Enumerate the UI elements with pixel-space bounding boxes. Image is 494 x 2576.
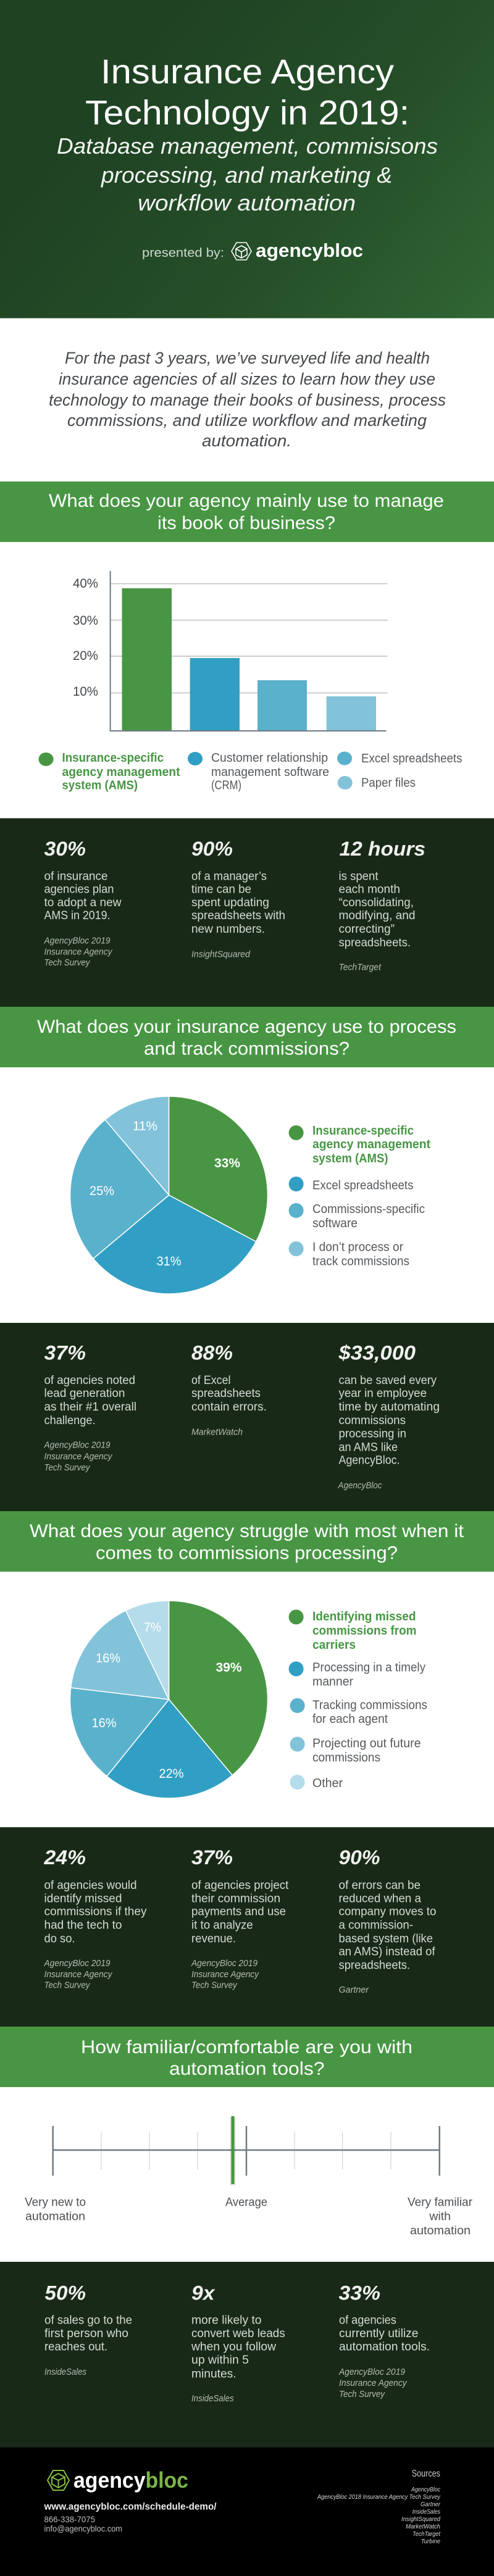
stat: 9x: 9x	[191, 2282, 216, 2304]
bar chart legend: Insurance-specific	[62, 751, 164, 765]
panel: section 3 heading	[0, 1511, 494, 1572]
bar chart legend: (CRM)	[211, 779, 241, 793]
intro text: insurance agencies of all sizes to learn how they use	[59, 370, 435, 388]
stat: 37%: Tech Survey	[44, 1462, 91, 1473]
bar chart: 20%	[73, 649, 98, 663]
stat: 9x: InsideSales	[191, 2393, 234, 2404]
pie chart: commission tracking tools: 31%	[157, 1254, 182, 1269]
stat: 33%: Tech Survey	[339, 2389, 385, 2399]
pie legend: commission tracking tools: Excel spreadsheets	[312, 1179, 414, 1193]
stat: 90%: new numbers.	[191, 923, 265, 936]
icon: agencybloc hexagon logo	[232, 243, 251, 260]
stat: 30%: agencies plan	[44, 883, 114, 896]
pie legend: commission tracking tools: agency management	[312, 1138, 430, 1151]
stat: 24%: 24%	[43, 1846, 86, 1869]
stat: 37% projections: 37%	[191, 1846, 233, 1869]
bar chart	[73, 571, 388, 731]
pie legend: commissions struggles: Tracking commissions	[312, 1699, 427, 1712]
pie legend: commissions struggles: Projecting out future	[312, 1737, 421, 1751]
contact details: 866-338-7075	[44, 2514, 95, 2524]
stat: 88%: MarketWatch	[191, 1427, 243, 1437]
contact details: info@agencybloc.com	[44, 2524, 122, 2533]
intro text: commissions, and utilize workflow and marketing	[67, 411, 427, 430]
average marker	[230, 2116, 236, 2185]
panel: section 1 heading: its book of business?	[157, 513, 335, 533]
stat: 30%: to adopt a new	[44, 896, 122, 909]
stat: $33,000: year in employee	[338, 1387, 427, 1400]
stat: 88%: of Excel	[191, 1374, 231, 1387]
intro text	[49, 349, 446, 450]
stat: 9x: convert web leads	[191, 2327, 285, 2340]
contact details	[44, 2502, 217, 2533]
pie legend: commissions struggles: manner	[312, 1675, 353, 1689]
stat: $33,000: time by automating	[338, 1401, 440, 1414]
panel: section 2 heading: and track commissions?	[144, 1038, 350, 1059]
stat: 12 hours: TechTarget	[338, 962, 382, 973]
stat: 37%: AgencyBloc 2019	[44, 1440, 111, 1451]
pie legend: commissions struggles: Processing in a timely	[312, 1661, 425, 1674]
panel: section 3 heading: What does your agency struggle with most when it	[30, 1521, 464, 1541]
panel: section 4 heading	[0, 2027, 494, 2087]
panel: footer	[0, 2447, 494, 2576]
panel: section 3 heading: comes to commissions processing?	[96, 1543, 398, 1563]
logo wordmark: agencybloc	[256, 240, 363, 261]
pie legend: commissions struggles: Identifying missed	[312, 1610, 416, 1624]
stat: 37% projections: payments and use	[191, 1906, 286, 1919]
stat: 88%: spreadsheets	[191, 1387, 261, 1400]
pie chart: commission tracking tools: 25%	[90, 1184, 114, 1198]
stat: 12 hours: is spent	[338, 870, 379, 883]
stat: 30%: 30%	[44, 838, 86, 860]
stat: 30%: AMS in 2019.	[44, 909, 110, 922]
intro text: For the past 3 years, we’ve surveyed life and health	[65, 349, 430, 367]
pie chart: commission tracking tools	[70, 1096, 267, 1294]
stat: 30%: Insurance Agency	[44, 947, 113, 957]
stat: 24%: of agencies would	[44, 1879, 137, 1892]
intro text: automation.	[202, 431, 291, 450]
pie chart: commissions struggles: 16%	[91, 1716, 116, 1730]
stat: 37% projections: Insurance Agency	[191, 1969, 259, 1980]
pie chart: commission tracking tools: 11%	[133, 1119, 157, 1133]
stat: 33%: currently utilize	[339, 2327, 419, 2340]
stat: 37%: Insurance Agency	[44, 1451, 113, 1462]
bar chart legend: Customer relationship	[211, 751, 328, 765]
stat: 37%: challenge.	[44, 1414, 95, 1427]
stat: 90% errors: a commission-	[338, 1919, 413, 1932]
title: Insurance Agency	[101, 52, 394, 91]
pie legend: commissions struggles: Other	[312, 1777, 343, 1790]
stat: 12 hours	[338, 838, 425, 973]
bar chart: 30%	[73, 614, 98, 628]
stat: 90%: 90%	[191, 838, 233, 860]
stat: $33,000	[338, 1342, 440, 1491]
stat: 9x: minutes.	[191, 2368, 237, 2380]
bar chart legend: management software	[211, 765, 329, 779]
stat: $33,000: AgencyBloc	[338, 1480, 382, 1491]
stat: 88%: 88%	[191, 1342, 233, 1364]
subtitle: processing, and marketing &	[101, 162, 392, 188]
stat: 30%: Tech Survey	[44, 957, 91, 968]
bar chart legend: system (AMS)	[62, 779, 138, 793]
pie chart: commissions struggles: 7%	[144, 1620, 161, 1635]
stat: 50%	[44, 2282, 132, 2377]
sources list: AgencyBloc 2018 Insurance Agency Tech Survey	[317, 2493, 441, 2501]
scale labels: with	[429, 2210, 451, 2224]
stat: 90% errors: 90%	[338, 1846, 380, 1869]
stat: 33%: AgencyBloc 2019	[338, 2367, 406, 2377]
sources list: AgencyBloc	[411, 2486, 441, 2493]
stat: 12 hours: “consolidating,	[338, 896, 414, 909]
pie legend: commissions struggles: for each agent	[312, 1712, 388, 1726]
footer logo wordmark: agencybloc	[73, 2467, 188, 2493]
stat: 37%: as their #1 overall	[44, 1401, 136, 1414]
stat: 90%: time can be	[191, 883, 251, 896]
stat: 33%: automation tools.	[339, 2341, 430, 2353]
panel: section 4 heading: automation tools?	[169, 2059, 325, 2079]
stat: 50%: InsideSales	[44, 2367, 86, 2377]
stat: 24%: AgencyBloc 2019	[44, 1958, 111, 1969]
stat: $33,000: an AMS like	[338, 1441, 398, 1454]
stat: 50%: 50%	[44, 2282, 86, 2304]
stat: 90% errors: company moves to	[338, 1906, 436, 1919]
presented by label: presented by:	[142, 246, 224, 260]
panel: section 2 heading	[0, 1007, 494, 1067]
stat: 24%: Insurance Agency	[44, 1969, 113, 1980]
pie legend: commission tracking tools: system (AMS)	[312, 1152, 388, 1165]
panel: section 1 stats	[0, 819, 494, 1007]
sources list: Gartner	[421, 2501, 440, 2508]
stat: 30%: of insurance	[44, 870, 107, 883]
stat: 37% projections: of agencies project	[191, 1879, 289, 1892]
sources list: TechTarget	[412, 2530, 441, 2538]
sources list: Turbine	[421, 2538, 440, 2545]
stat: 30%: AgencyBloc 2019	[44, 936, 111, 946]
pie chart: commissions struggles	[70, 1601, 268, 1798]
stat: 12 hours: correcting”	[338, 923, 395, 936]
stat: 88%: contain errors.	[191, 1401, 267, 1414]
stat: 50%: of sales go to the	[44, 2314, 132, 2327]
pie chart: commission tracking tools: 33%	[214, 1156, 240, 1170]
panel: section 3 stats	[0, 1827, 494, 2027]
bar chart legend: Excel spreadsheets	[361, 752, 462, 765]
stat: 12 hours: spreadsheets.	[338, 936, 411, 949]
stat: 9x: when you follow	[191, 2341, 276, 2353]
stat: 37%: 37%	[44, 1342, 86, 1364]
pie chart: commissions struggles: 39%	[216, 1661, 242, 1675]
stat: 12 hours: modifying, and	[338, 909, 415, 922]
icon: footer hexagon logo	[48, 2470, 69, 2490]
stat: 37%: of agencies noted	[44, 1374, 135, 1387]
stat: 37%: lead generation	[44, 1387, 125, 1400]
stat: 24%: commissions if they	[44, 1906, 147, 1919]
pie legend: commissions struggles: commissions from	[312, 1624, 416, 1638]
stat: 90%: spent updating	[191, 896, 269, 909]
stat: 37% projections: their commission	[191, 1893, 280, 1906]
stat: 88%	[191, 1342, 267, 1437]
pie chart: commissions struggles: 22%	[159, 1767, 184, 1781]
subtitle: Database management, commisisons	[57, 133, 438, 159]
panel: section 2 stats	[0, 1323, 494, 1511]
subtitle: workflow automation	[138, 190, 356, 215]
panel: section 1 heading	[0, 481, 494, 542]
stat: 90%	[191, 838, 285, 959]
pie legend: commission tracking tools: Commissions-specific	[312, 1203, 425, 1216]
stat: $33,000: can be saved every	[338, 1374, 437, 1387]
pie legend: commission tracking tools: I don’t process or	[312, 1241, 403, 1254]
stat: 9x: more likely to	[191, 2314, 262, 2327]
stat: 90% errors: based system (like	[338, 1932, 433, 1946]
scale labels	[25, 2196, 473, 2237]
stat: 90% errors: spreadsheets.	[338, 1959, 410, 1972]
panel: section 4 stats	[0, 2262, 494, 2447]
sources list: Sources	[412, 2469, 440, 2479]
stat: 37%	[44, 1342, 136, 1473]
stat: 12 hours: 12 hours	[340, 838, 425, 860]
scale labels: Average	[225, 2196, 267, 2209]
stat: 24%: identify missed	[44, 1893, 122, 1906]
stat: 37% projections: it to analyze	[191, 1919, 253, 1932]
stat: 37% projections: revenue.	[191, 1932, 236, 1946]
bar chart legend	[38, 751, 462, 793]
contact details: www.agencybloc.com/schedule-demo/	[44, 2502, 217, 2512]
sources list: InsightSquared	[401, 2516, 441, 2523]
stat: 24%: had the tech to	[44, 1919, 122, 1932]
scale chart: automation familiarity	[25, 2116, 473, 2237]
pie legend: commission tracking tools: track commissions	[312, 1254, 409, 1268]
stat: $33,000: commissions	[338, 1414, 406, 1427]
pie chart: commissions struggles: 16%	[96, 1651, 120, 1665]
scale labels: automation	[410, 2225, 471, 2237]
scale labels: Very familiar	[408, 2196, 473, 2209]
pie legend: commissions struggles: commissions	[312, 1751, 380, 1765]
pie legend: commission tracking tools: Insurance-specific	[312, 1124, 414, 1138]
stat: 90% errors	[338, 1846, 436, 1995]
stat: 90% errors: reduced when a	[338, 1893, 421, 1906]
pie legend: commissions struggles: carriers	[312, 1638, 356, 1652]
stat: 37% projections: Tech Survey	[191, 1980, 238, 1990]
stat: 24%: do so.	[44, 1932, 75, 1946]
pie legend: commission tracking tools	[289, 1124, 430, 1268]
panel: section 2 heading: What does your insurance agency use to process	[37, 1017, 456, 1037]
scale labels: automation	[25, 2210, 85, 2224]
stat: 90% errors: Gartner	[338, 1985, 369, 1995]
stat: 90% errors: of errors can be	[338, 1879, 421, 1892]
stat: 33%: 33%	[338, 2282, 380, 2304]
stat: 50%: reaches out.	[44, 2341, 107, 2353]
bar chart: 10%	[73, 685, 98, 699]
subtitle	[57, 133, 438, 215]
stat: 33%: Insurance Agency	[339, 2378, 408, 2388]
title: Technology in 2019:	[85, 93, 409, 132]
stat: 24%: Tech Survey	[44, 1980, 91, 1990]
pie legend: commission tracking tools: software	[312, 1217, 358, 1230]
stat: 37% projections	[191, 1846, 289, 1990]
bar chart legend: Paper files	[361, 777, 416, 790]
stat: 90% errors: an AMS) instead of	[338, 1946, 435, 1958]
stat: 90%: of a manager’s	[191, 870, 267, 883]
stat: $33,000: AgencyBloc.	[338, 1454, 400, 1467]
sources list	[317, 2469, 441, 2545]
stat: 90%: spreadsheets with	[191, 909, 285, 922]
stat: $33,000: $33,000	[338, 1342, 416, 1364]
intro text: technology to manage their books of business, process	[49, 391, 446, 409]
title	[85, 52, 409, 132]
bar chart: 40%	[73, 577, 98, 591]
scale labels: Very new to	[25, 2196, 86, 2209]
panel: hero header	[0, 0, 494, 319]
stat: 12 hours: each month	[338, 883, 400, 896]
panel: section 4 heading: How familiar/comfortable are you with	[81, 2037, 412, 2057]
pie legend: commissions struggles	[289, 1610, 427, 1790]
stat: 9x	[191, 2282, 285, 2404]
sources list: MarketWatch	[406, 2523, 440, 2530]
stat: 90%: InsightSquared	[191, 949, 251, 959]
sources list: InsideSales	[412, 2508, 441, 2516]
stat: 30%	[44, 838, 122, 968]
stat: 33%	[338, 2282, 430, 2399]
stat: 33%: of agencies	[339, 2314, 396, 2327]
panel: section 1 heading: What does your agency mainly use to manage	[49, 491, 444, 511]
stat: 37% projections: AgencyBloc 2019	[191, 1958, 258, 1969]
bar chart legend: agency management	[62, 765, 180, 779]
stat: 9x: up within 5	[191, 2354, 249, 2367]
stat: 50%: first person who	[44, 2327, 128, 2340]
stat: 24%	[43, 1846, 147, 1990]
stat: $33,000: processing in	[338, 1427, 406, 1441]
